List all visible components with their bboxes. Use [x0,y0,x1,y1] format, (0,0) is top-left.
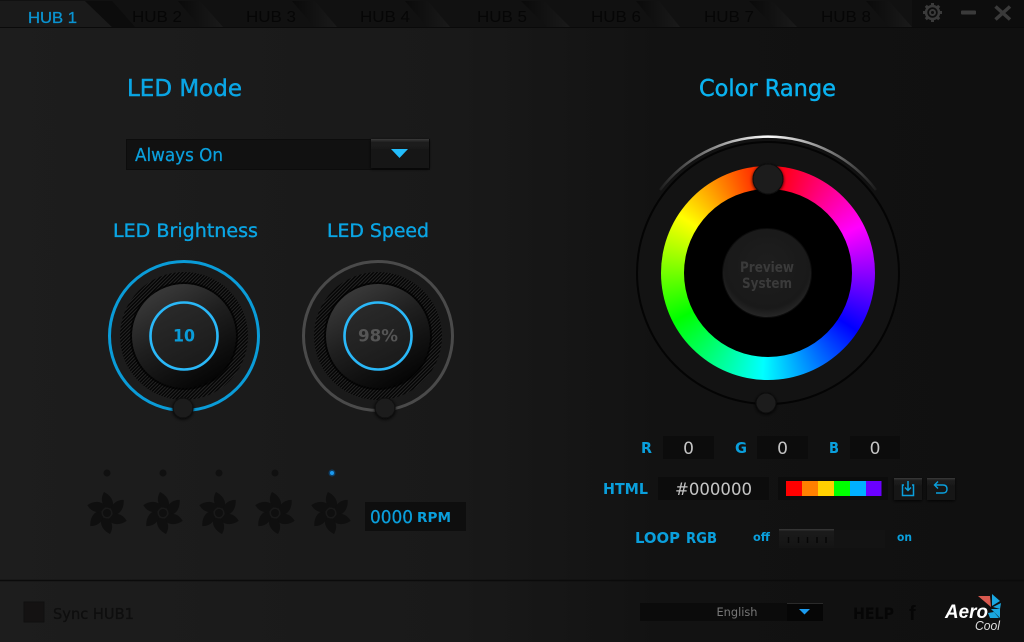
tab: HUB 2 [85,1,223,27]
tab: HUB 7: HUB 7 [704,9,754,26]
B input: B [829,439,839,457]
off label: off [753,530,771,544]
icon: fan 5 [310,492,352,534]
knob handle [375,398,395,418]
icon: facebook: f [909,603,916,625]
RGB inputs [641,436,900,459]
logo: Aerocool [944,594,1001,633]
heading: LED Mode: LED Mode [127,76,242,102]
tab: HUB 7 [704,1,797,27]
tab: HUB 4: HUB 4 [360,9,410,26]
language dropdown: English [716,605,758,619]
G input: 0 [777,439,788,459]
tab: HUB 4 [360,1,450,27]
LOOP RGB label [635,529,717,547]
top highlight arc [660,137,876,190]
heading: LED Brightness: LED Brightness [113,221,258,242]
language dropdown [640,603,823,621]
dropdown button [371,139,429,168]
RPM readout [365,502,466,531]
logo: Aerocool: Cool [975,618,1001,633]
knob value: 10 [173,326,195,346]
tab: HUB 3: HUB 3 [246,9,296,26]
dropdown: LED mode [126,139,430,170]
footer [0,580,1024,633]
G input [735,436,808,459]
sync checkbox [24,602,44,622]
indicator dots [104,470,336,476]
HTML value input [658,477,769,500]
hue handle [753,164,783,194]
help label: HELP [853,604,894,623]
LOOP RGB label: LOOP [635,529,680,547]
tab: HUB 1 active [0,1,112,27]
logo: Aerocool: Aero [944,602,988,623]
tab: HUB 8 [821,1,912,27]
knob: LED speed [304,262,452,418]
dropdown value: Always On [135,145,223,166]
preview button: Preview [740,260,794,276]
hue ring [661,166,875,380]
icon: settings gear [923,3,942,22]
RPM readout: 0000 [370,507,413,528]
icon: dropdown arrow [391,149,408,158]
preview button [722,228,812,318]
tab: HUB 8: HUB 8 [821,9,871,26]
LOOP RGB label: RGB [686,529,717,547]
fan status row [86,470,352,534]
tab: HUB 5 [477,1,570,27]
knob handle [173,398,193,418]
button: undo [927,478,955,500]
knob value: 98% [358,326,398,346]
tab: HUB 6 [591,1,680,27]
preview button: System [742,276,792,292]
button: save [894,478,922,500]
knob: LED brightness [110,262,258,418]
RPM readout: RPM [417,510,451,526]
toggle switch [779,529,885,548]
icon: fan 2 [142,492,184,534]
heading: LED Speed: LED Speed [327,221,429,242]
R input [641,436,714,459]
heading: Color Range: Color Range [699,76,836,102]
B input [829,436,900,459]
sync label: Sync HUB1 [53,605,134,623]
color preset swatches [778,477,888,500]
tab: HUB 1 active: HUB 1 [28,10,77,27]
icon: close [996,6,1010,20]
tab bar [0,0,1024,27]
tab: HUB 5: HUB 5 [477,9,527,26]
B input: 0 [870,439,880,459]
color wheel [637,137,899,413]
R input: R [641,439,652,457]
icon: fan 4 [254,492,296,534]
HTML label: HTML [603,480,648,498]
R input: 0 [683,439,694,459]
icon: fan 1 [86,492,128,534]
HTML value input: #000000 [675,480,752,500]
G input: G [735,439,747,457]
tab: HUB 6: HUB 6 [591,9,641,26]
on label: on [897,530,912,544]
tab: HUB 3 [246,1,337,27]
outer ring [637,142,899,404]
tab: HUB 2: HUB 2 [132,9,182,26]
icon: fan 3 [198,492,240,534]
brightness handle [756,393,776,413]
icon: minimize [961,10,976,14]
